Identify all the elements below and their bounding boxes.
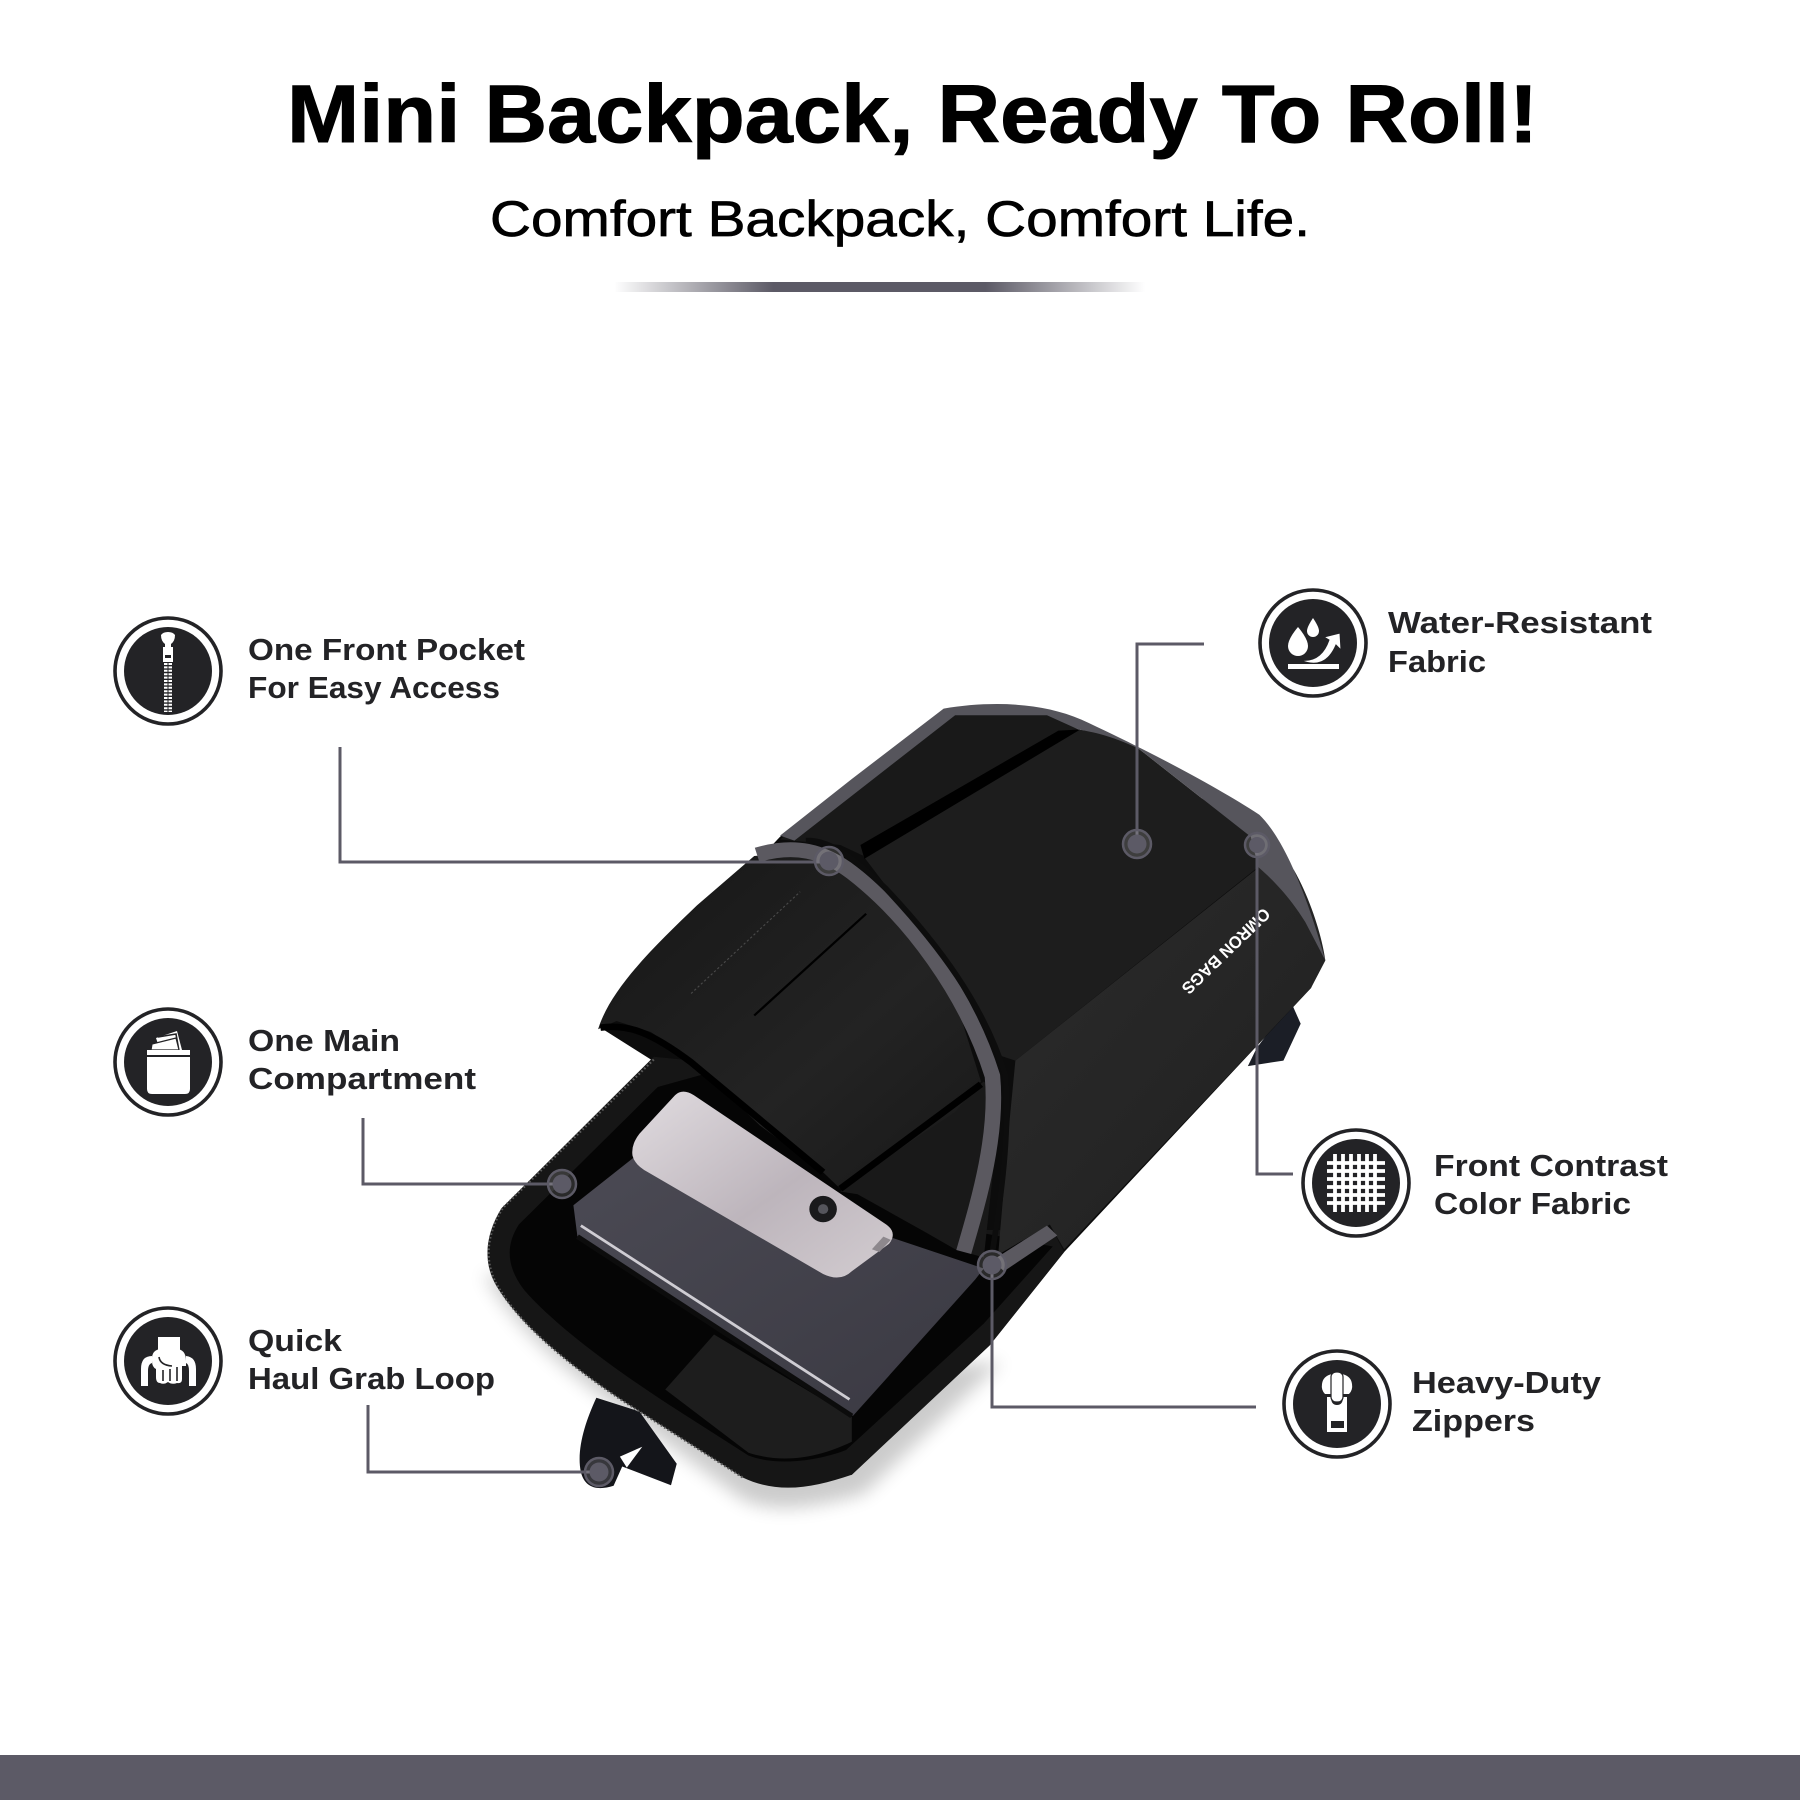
- label: one main compartment: One Main: [248, 1023, 400, 1058]
- grab loop: [580, 1398, 677, 1488]
- brand logo on bag: OMRON BAGS: [1178, 904, 1274, 998]
- bag base silhouette: [600, 713, 1322, 1478]
- icon: main compartment: [115, 1009, 221, 1115]
- icon: grab loop hand: [115, 1308, 221, 1414]
- label: quick haul grab loop: Haul Grab Loop: [248, 1361, 495, 1396]
- callout line: grab loop: [368, 1405, 613, 1486]
- grey zipper trim: [757, 841, 1057, 1271]
- top panel above zipper: [780, 712, 1079, 857]
- label: one front pocket: [248, 632, 525, 705]
- label: quick haul grab loop: [248, 1323, 495, 1396]
- label: front contrast color fabric: [1434, 1148, 1668, 1221]
- front pocket slit: [860, 730, 1080, 859]
- title: Mini Backpack, Ready To Roll!: [287, 69, 1538, 160]
- phone: [632, 1092, 893, 1278]
- inner back panel: [840, 1082, 1001, 1258]
- label: front contrast color fabric: Color Fabric: [1434, 1186, 1631, 1221]
- callout line: main compartment: [363, 1118, 576, 1198]
- body side panel: [998, 867, 1325, 1255]
- heading underline bar: [614, 282, 1145, 292]
- front pocket flap: [598, 855, 981, 1189]
- lid zipper rim: [489, 1060, 743, 1478]
- callout line: contrast fabric: [1245, 833, 1293, 1174]
- back strap: [1248, 1002, 1301, 1066]
- label: quick haul grab loop: Quick: [248, 1323, 343, 1358]
- label: water-resistant fabric: Water-Resistant: [1388, 605, 1652, 640]
- label: heavy-duty zippers: Heavy-Duty: [1412, 1365, 1602, 1400]
- body front panel: [863, 730, 1258, 1061]
- subtitle: Comfort Backpack, Comfort Life.: [490, 191, 1310, 247]
- callout line: front pocket: [340, 747, 843, 875]
- icon: heavy-duty zipper pull: [1284, 1351, 1390, 1457]
- icon: woven fabric: [1303, 1130, 1409, 1236]
- ground shadow: [484, 1274, 1001, 1508]
- grey top edge binding: [780, 704, 1325, 960]
- callout line: zippers: [978, 1251, 1256, 1407]
- bottom band: [0, 1755, 1800, 1800]
- label: one main compartment: [248, 1023, 476, 1096]
- open lid shell: [487, 1057, 1064, 1488]
- lid inner lining: [510, 1065, 1053, 1461]
- label: front contrast color fabric: Front Contrast: [1434, 1148, 1668, 1183]
- backpack photo illustration: [484, 704, 1325, 1508]
- label: one front pocket: For Easy Access: [248, 670, 500, 705]
- lower lining panel: [665, 1334, 852, 1458]
- label: water-resistant fabric: [1388, 605, 1652, 679]
- callout line: water-resistant: [1123, 644, 1204, 858]
- icon: water-resistant: [1260, 590, 1366, 696]
- icon: front pocket zipper: [115, 618, 221, 724]
- tablet: [573, 1153, 984, 1416]
- label: one front pocket: One Front Pocket: [248, 632, 525, 667]
- label: one main compartment: Compartment: [248, 1061, 476, 1096]
- label: heavy-duty zippers: [1412, 1365, 1602, 1438]
- label: water-resistant fabric: Fabric: [1388, 644, 1486, 679]
- label: heavy-duty zippers: Zippers: [1412, 1403, 1535, 1438]
